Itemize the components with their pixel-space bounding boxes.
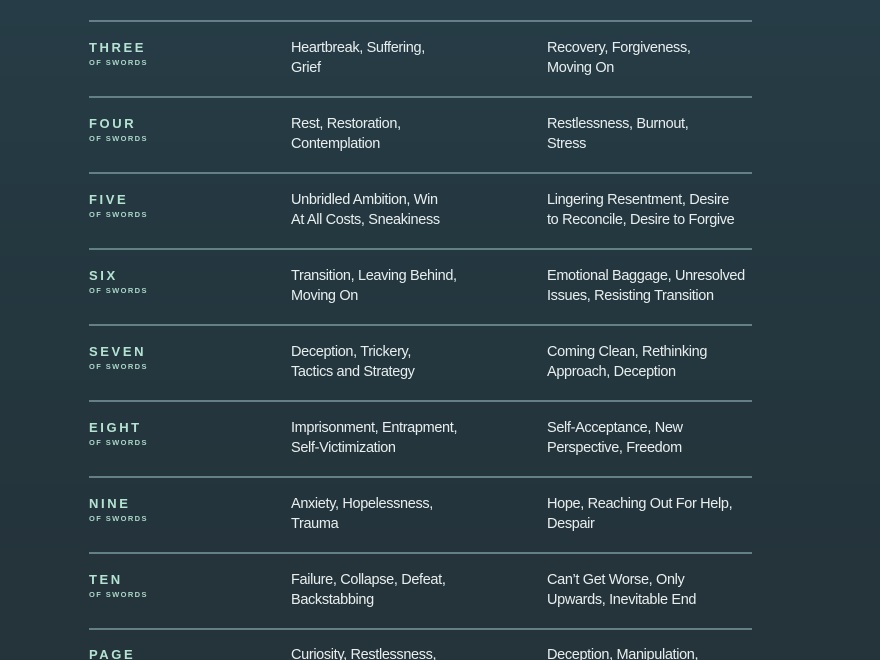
- text: OF SWORDS: [89, 58, 148, 67]
- row: four of swords: Rest, Restoration,: [291, 116, 401, 132]
- row: four of swords: Restlessness, Burnout,: [547, 116, 688, 132]
- row: seven of swords: Deception, Trickery,: [291, 344, 411, 360]
- text: OF SWORDS: [89, 514, 148, 523]
- row: seven of swords: [89, 344, 707, 380]
- row: nine of swords: NINE: [89, 496, 130, 511]
- text: Stress: [547, 136, 586, 152]
- row: six of swords: [89, 268, 745, 304]
- row: ten of swords: Can’t Get Worse, Only: [547, 572, 684, 588]
- text: Upwards, Inevitable End: [547, 592, 696, 608]
- row: three of swords: Heartbreak, Suffering,: [291, 40, 425, 56]
- row: six of swords: Transition, Leaving Behind,: [291, 268, 457, 284]
- text: to Reconcile, Desire to Forgive: [547, 212, 734, 228]
- row: five of swords: FIVE: [89, 192, 128, 207]
- row: nine of swords: Anxiety, Hopelessness,: [291, 496, 433, 512]
- row: ten of swords: [89, 572, 696, 608]
- row: eight of swords: Self-Acceptance, New: [547, 420, 683, 436]
- row: four of swords: FOUR: [89, 116, 136, 131]
- text: Moving On: [291, 288, 358, 304]
- row: five of swords: Lingering Resentment, Desire: [547, 192, 729, 208]
- row: six of swords: Emotional Baggage, Unresolved: [547, 268, 745, 284]
- row: ten of swords: TEN: [89, 572, 123, 587]
- row: six of swords: SIX: [89, 268, 118, 283]
- text: OF SWORDS: [89, 362, 148, 371]
- text: OF SWORDS: [89, 134, 148, 143]
- text: OF SWORDS: [89, 286, 148, 295]
- text: OF SWORDS: [89, 590, 148, 599]
- row: nine of swords: [89, 496, 732, 532]
- text: Moving On: [547, 60, 614, 76]
- text: Perspective, Freedom: [547, 440, 682, 456]
- text: Tactics and Strategy: [291, 364, 415, 380]
- row: eight of swords: [89, 420, 683, 456]
- text: Contemplation: [291, 136, 380, 152]
- row: nine of swords: Hope, Reaching Out For Help,: [547, 496, 732, 512]
- row: five of swords: [89, 192, 734, 228]
- text: OF SWORDS: [89, 438, 148, 447]
- row: three of swords: [89, 40, 691, 76]
- row: three of swords: Recovery, Forgiveness,: [547, 40, 691, 56]
- row: five of swords: Unbridled Ambition, Win: [291, 192, 438, 208]
- text: Despair: [547, 516, 595, 532]
- row: page of swords: [89, 647, 698, 660]
- text: OF SWORDS: [89, 210, 148, 219]
- text: Issues, Resisting Transition: [547, 288, 714, 304]
- text: Backstabbing: [291, 592, 374, 608]
- text: Approach, Deception: [547, 364, 676, 380]
- row: eight of swords: EIGHT: [89, 420, 142, 435]
- text: Self-Victimization: [291, 440, 396, 456]
- row: eight of swords: Imprisonment, Entrapment,: [291, 420, 457, 436]
- text: Trauma: [291, 516, 338, 532]
- row: ten of swords: Failure, Collapse, Defeat,: [291, 572, 446, 588]
- row: seven of swords: SEVEN: [89, 344, 146, 359]
- row: three of swords: THREE: [89, 40, 146, 55]
- row: seven of swords: Coming Clean, Rethinking: [547, 344, 707, 360]
- text: At All Costs, Sneakiness: [291, 212, 440, 228]
- row: four of swords: [89, 116, 688, 152]
- text: Grief: [291, 60, 321, 76]
